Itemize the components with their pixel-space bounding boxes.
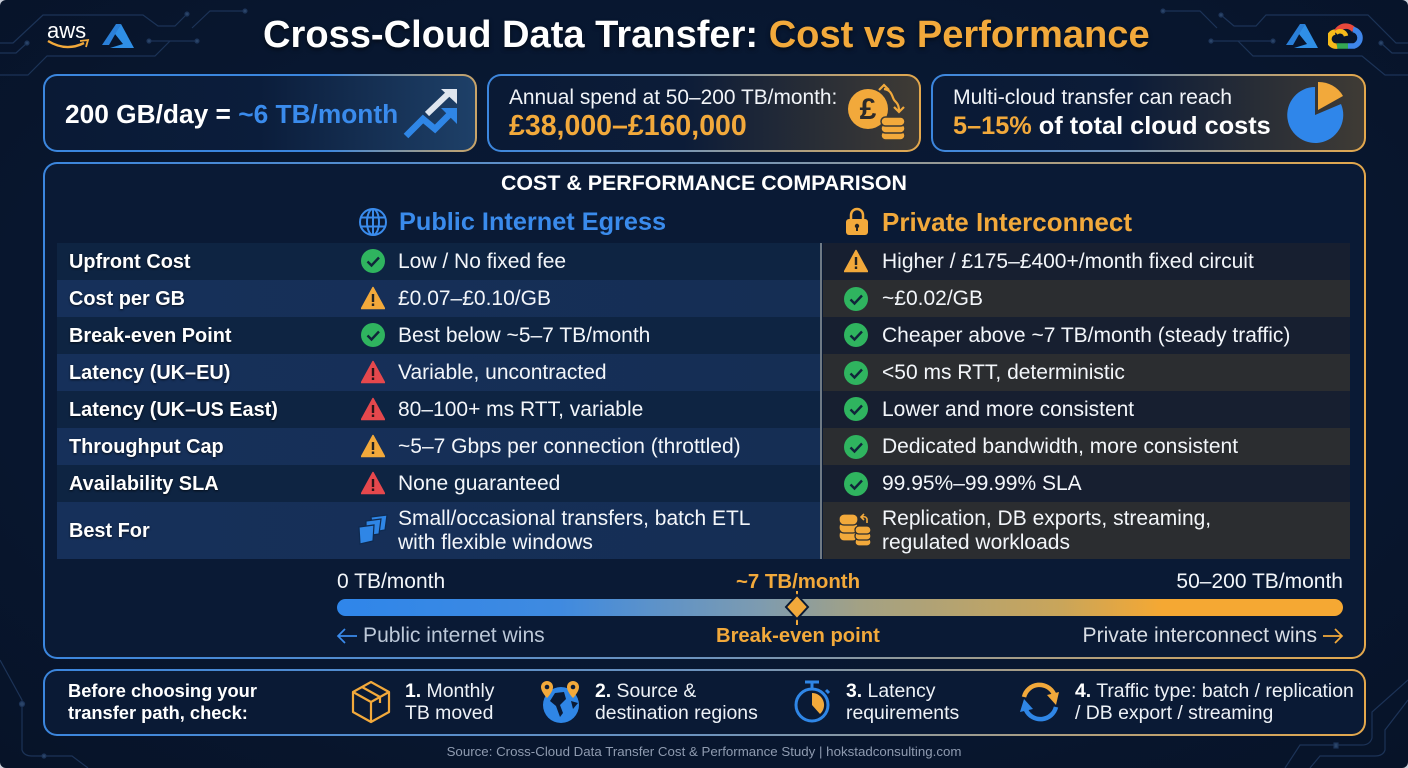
break-even marker (784, 587, 810, 629)
table row: availability SLA: Availability SLA (69, 473, 219, 495)
check item 2: destination regions (595, 702, 758, 724)
check item 3: 3. Latency (846, 680, 935, 702)
table row: cost per GB: Cost per GB (69, 288, 185, 310)
scale label: start: 0 TB/month (337, 570, 445, 593)
checklist heading: Before choosing your (68, 680, 257, 701)
stat text: 200 GB/day = ~6 TB/month (65, 99, 398, 129)
table row: upfront cost: Higher / £175–£400+/month fixed circuit (882, 250, 1254, 273)
panel heading: COST & PERFORMANCE COMPARISON (501, 171, 907, 195)
check item 1 (405, 680, 494, 724)
check item 4: 4. Traffic type: batch / replication (1075, 680, 1354, 702)
icon: pound coin and stack (848, 84, 905, 140)
check item 2 (595, 680, 758, 724)
stat text: Annual spend at 50–200 TB/month: (509, 86, 837, 109)
icon: stacked files (359, 516, 386, 544)
icon: globe with pins (540, 680, 582, 724)
check item 4 (1075, 680, 1354, 724)
table row: latency UK-EU: <50 ms RTT, deterministic (882, 361, 1125, 384)
check item 1: 1. Monthly (405, 680, 494, 702)
table row: break-even point: Break-even Point (69, 325, 232, 347)
icon: good (361, 249, 385, 273)
check item 4: / DB export / streaming (1075, 702, 1273, 724)
gradient bar (337, 599, 1343, 616)
icon: good (844, 472, 868, 496)
table row: cost per GB (57, 280, 1350, 317)
table row: best for (57, 502, 1350, 559)
scale label: break-even volume: ~7 TB/month (736, 571, 860, 593)
check item 3 (846, 680, 959, 724)
column header: public internet: Public Internet Egress (399, 208, 666, 236)
stat card: daily to monthly (43, 74, 477, 152)
panel: checklist (43, 669, 1366, 736)
icon: pound coin and stack: £ (860, 93, 877, 126)
icon: warning (844, 250, 868, 272)
stat card: share of cloud costs (931, 74, 1366, 152)
stat card: annual spend (487, 74, 921, 152)
stat text: 5–15% of total cloud costs (953, 112, 1271, 140)
table row: latency UK-EU: Variable, uncontracted (398, 361, 607, 384)
table row: throughput cap: Dedicated bandwidth, more consistent (882, 435, 1238, 458)
table row: latency UK-US East (57, 391, 1350, 428)
table row: latency UK-EU: Latency (UK–EU) (69, 362, 230, 384)
source line: Source: Cross-Cloud Data Transfer Cost & Performance Study | hokstadconsulting.com (447, 744, 961, 759)
check item 1: TB moved (405, 702, 493, 724)
icon: risk (361, 398, 385, 420)
table row: best for: Best For (69, 520, 150, 542)
table row: latency UK-US East: Latency (UK–US East) (69, 399, 278, 421)
table row: upfront cost: Low / No fixed fee (398, 250, 566, 273)
icon: risk (361, 360, 385, 384)
icon: refresh arrows (1018, 680, 1062, 724)
logo: Azure right (1286, 24, 1318, 48)
icon: box (350, 680, 392, 724)
stat text: £38,000–£160,000 (509, 110, 747, 142)
title: Cross-Cloud Data Transfer: Cost vs Performance (263, 14, 1150, 56)
icon: good (844, 397, 868, 421)
logo: AWS: aws (47, 18, 86, 43)
table row: upfront cost: Upfront Cost (69, 251, 191, 273)
table row: cost per GB: £0.07–£0.10/GB (398, 287, 551, 310)
icon: globe (359, 208, 387, 236)
table row: latency UK-EU (57, 354, 1350, 391)
table row: best for: regulated workloads (882, 531, 1070, 554)
table row: availability SLA: None guaranteed (398, 472, 560, 495)
column divider (820, 243, 822, 559)
table row: availability SLA (57, 465, 1350, 502)
table row: best for: with flexible windows (398, 531, 593, 554)
stat text (509, 86, 837, 142)
icon: risk (361, 472, 385, 494)
arrow: right (1323, 628, 1343, 644)
table row: best for: Replication, DB exports, streaming, (882, 507, 1211, 530)
arrow: left (337, 628, 357, 644)
icon: good (361, 323, 385, 347)
table row: throughput cap: Throughput Cap (69, 436, 224, 458)
stat text (953, 86, 1271, 140)
table row: break-even point (57, 317, 1350, 354)
icon: good (844, 435, 868, 459)
checklist heading: transfer path, check: (68, 702, 248, 723)
logo: Azure left (102, 24, 134, 48)
logo: Google Cloud (1328, 23, 1363, 49)
icon: database coins (840, 513, 870, 546)
break-even scale (336, 570, 1344, 647)
icon: stopwatch (793, 680, 833, 724)
icon: good (844, 323, 868, 347)
icon: warning (361, 434, 385, 458)
check item 3: requirements (846, 702, 959, 724)
panel: cost and performance comparison (43, 162, 1366, 659)
private wins label: Private interconnect wins (1083, 624, 1317, 647)
icon: pie chart (1287, 82, 1344, 143)
stat text: Multi-cloud transfer can reach (953, 86, 1232, 109)
table row: break-even point: Best below ~5–7 TB/month (398, 324, 650, 347)
table row: break-even point: Cheaper above ~7 TB/month (steady traffic) (882, 324, 1290, 347)
check item 2: 2. Source & (595, 680, 696, 702)
icon: good (844, 361, 868, 385)
table row: latency UK-US East: Lower and more consistent (882, 398, 1134, 421)
table row: throughput cap (57, 428, 1350, 465)
scale label: end: 50–200 TB/month (1176, 570, 1343, 593)
column header: private interconnect: Private Interconnect (882, 207, 1132, 237)
checklist heading (68, 680, 257, 724)
table row: cost per GB: ~£0.02/GB (882, 287, 983, 310)
table row: latency UK-US East: 80–100+ ms RTT, variable (398, 398, 643, 421)
break-even label: Break-even point (716, 625, 880, 647)
icon: good (844, 287, 868, 311)
table row: availability SLA: 99.95%–99.99% SLA (882, 472, 1082, 495)
icon: padlock (846, 208, 868, 235)
icon: warning (361, 286, 385, 310)
table row: throughput cap: ~5–7 Gbps per connection (throttled) (398, 435, 741, 458)
public wins label: Public internet wins (363, 624, 545, 647)
table row: best for: Small/occasional transfers, batch ETL (398, 507, 750, 530)
table row: upfront cost (57, 243, 1350, 280)
icon: growth arrows (404, 89, 457, 138)
